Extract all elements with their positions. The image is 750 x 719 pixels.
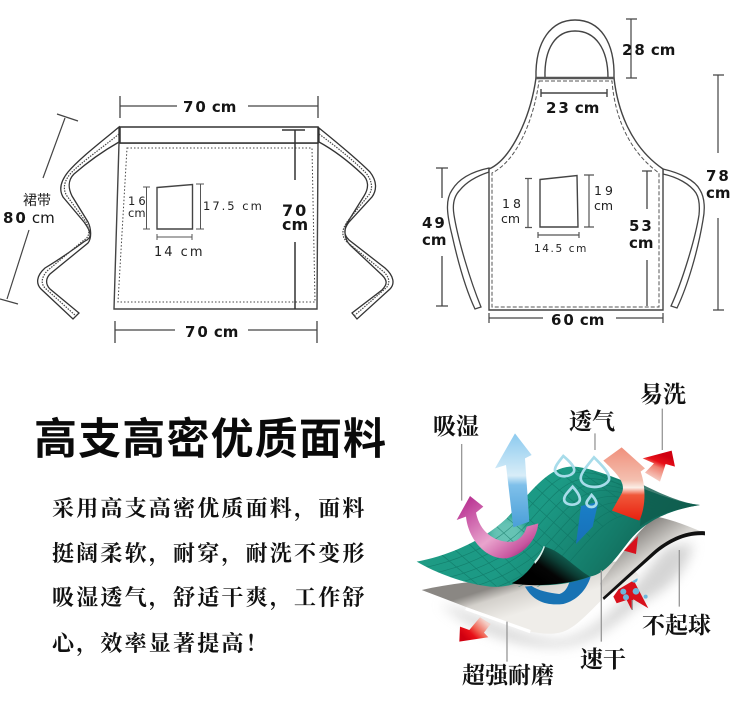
label: 18 cm: cm: [501, 211, 520, 226]
waistband: [120, 127, 318, 143]
label: tie name: 裙带: [23, 192, 51, 208]
line 1: 采用高支高密优质面料，面料: [52, 496, 367, 522]
label: 19 cm: 19: [594, 183, 616, 198]
body height dimension: [642, 171, 652, 306]
label: 60 cm: 60 cm: [551, 311, 604, 329]
red down arrow: [459, 617, 491, 642]
blue through arrow: [576, 502, 598, 544]
line 2: 挺阔柔软，耐穿，耐洗不变形: [52, 541, 367, 567]
leader lines: [462, 409, 679, 662]
darker right flap: [640, 485, 700, 527]
label: 16 cm: cm: [128, 206, 146, 220]
bib apron diagram: [422, 19, 731, 329]
bottom width dimension: [115, 321, 317, 343]
label: 16 cm: 16: [128, 194, 149, 208]
line 3: 吸湿透气，舒适干爽，工作舒: [52, 585, 367, 611]
dashed stitching: [492, 81, 659, 307]
salmon curved arrow: [603, 447, 645, 521]
pocket dimension lines: [143, 184, 204, 240]
right tie: [663, 169, 704, 308]
blue return arrow: [525, 577, 591, 604]
magenta curved arrow: [457, 496, 538, 558]
red arrow behind the sheet: [624, 536, 638, 554]
pale patch on sheet: [488, 517, 525, 550]
green upper sheet: [417, 467, 700, 587]
label: 18 cm: 18: [502, 196, 524, 211]
top width dimension: [120, 96, 318, 118]
soft shadow: [440, 543, 693, 647]
apron body: [114, 143, 318, 309]
blue up arrow: [495, 433, 532, 527]
tie dimension: [436, 168, 448, 306]
woven grid: [426, 468, 675, 587]
red easy-wash arrow: [643, 451, 675, 482]
title: 高支高密优质面料: [34, 405, 386, 467]
label: easy to wash: 易洗: [640, 382, 686, 407]
neck width dimension: [541, 89, 607, 97]
label: side 70 cm: cm: [282, 215, 308, 234]
label: 49 cm: 49: [422, 214, 447, 232]
pocket: [540, 176, 578, 227]
silver lower sheet, right part: [600, 517, 705, 598]
label: breathable: 透气: [569, 409, 615, 434]
pocket: [157, 184, 192, 229]
pilling arrow and particles: [613, 573, 648, 610]
description text: [52, 496, 367, 657]
dark edge of silver sheet: [603, 531, 705, 600]
left waist tie: [38, 127, 119, 319]
height dimension: [282, 130, 305, 309]
neck seam: [536, 77, 614, 79]
pocket dimension lines: [525, 175, 594, 238]
label: anti pilling: 不起球: [642, 613, 711, 638]
tie length dimension: [0, 114, 78, 304]
label: 78 cm: cm: [706, 184, 731, 202]
label: 53 cm: 53: [629, 217, 654, 235]
label: bottom 70 cm: 70 cm: [185, 323, 238, 341]
full height dimension: [713, 75, 724, 310]
label: 78 cm: 78: [706, 167, 731, 185]
label: 14.5 cm: 14.5 cm: [534, 243, 588, 255]
label: 23 cm: 23 cm: [546, 99, 599, 117]
fabric layers illustration: [417, 409, 712, 662]
label: 80 cm: 80 cm: [3, 209, 55, 227]
label: 19 cm: cm: [594, 198, 613, 213]
label: 53 cm: cm: [629, 234, 654, 252]
left tie: [447, 168, 489, 309]
dark underside wedge: [512, 547, 590, 585]
line 4: 心，效率显著提高！: [52, 631, 270, 657]
breathable droplets: [555, 456, 609, 507]
neck strap: [536, 20, 614, 78]
strap height dimension: [626, 19, 637, 78]
label: top 70 cm: 70 cm: [183, 98, 236, 116]
label: side 70 cm: 70: [282, 201, 308, 220]
label: durable: 超强耐磨: [462, 662, 554, 688]
light edge of silver sheet: [465, 607, 531, 633]
label: 28 cm: 28 cm: [622, 41, 675, 59]
stitching: [118, 148, 315, 302]
label: absorbs moisture: 吸湿: [433, 414, 479, 439]
bib body: [489, 78, 663, 310]
silver lower sheet, left part: [422, 561, 640, 634]
light highlight on sheet edge: [534, 546, 545, 564]
label: 49 cm: cm: [422, 231, 447, 249]
bottom width dimension: [489, 313, 663, 323]
right waist tie: [319, 128, 393, 319]
label: 17.5 cm: 17.5 cm: [203, 199, 264, 213]
half apron diagram: [0, 96, 393, 343]
label: quick dry: 速干: [580, 647, 626, 672]
label: 14 cm: 14 cm: [154, 245, 204, 260]
